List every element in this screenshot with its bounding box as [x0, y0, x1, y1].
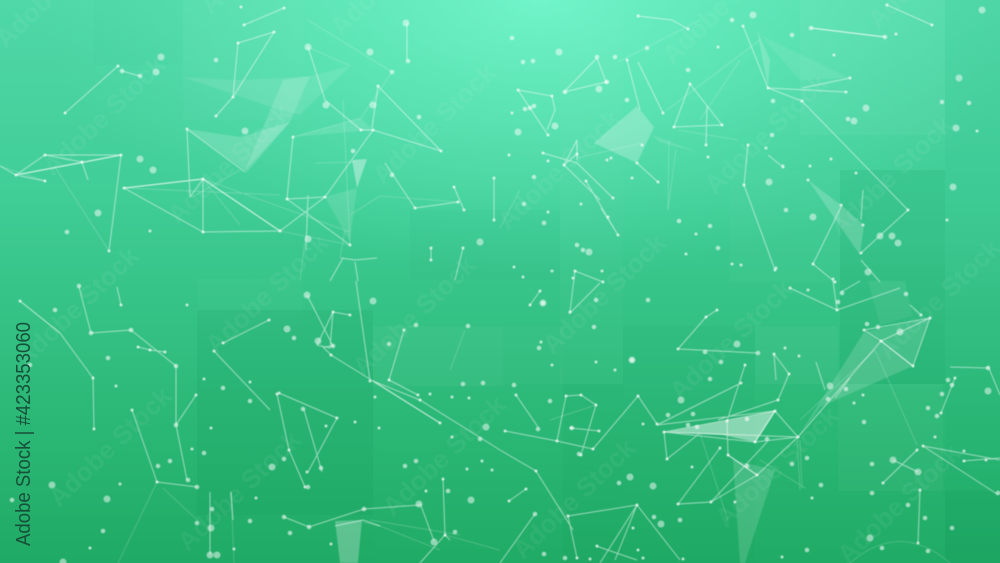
watermark: repeated Adobe Stock: Adobe Stock: [366, 57, 502, 190]
polygon cluster: upper right: [757, 30, 913, 325]
watermark: repeated Adobe Stock: Adobe Stock: [663, 273, 799, 406]
watermark: repeated Adobe Stock: Adobe Stock: [346, 249, 482, 382]
watermark: repeated Adobe Stock: Adobe Stock: [491, 103, 627, 236]
watermark: repeated Adobe Stock: Adobe Stock: [506, 432, 642, 563]
polygon cluster: top centre kite: [594, 106, 700, 163]
watermark: repeated Adobe Stock: Adobe Stock: [823, 109, 959, 242]
watermark: repeated Adobe Stock: Adobe Stock: [199, 227, 335, 360]
polygon cluster: lower right beam: [664, 318, 930, 563]
watermark: repeated Adobe Stock: Adobe Stock: [36, 49, 172, 182]
watermark: repeated Adobe Stock: Adobe Stock: [376, 389, 512, 522]
watermark: repeated Adobe Stock: Adobe Stock: [171, 424, 307, 557]
stock image id label: Adobe Stock | #423353060: [13, 322, 35, 546]
watermark: repeated Adobe Stock: Adobe Stock: [42, 380, 178, 513]
polygon cluster: upper left: [182, 66, 373, 172]
translucent plexus polygons: [182, 30, 930, 563]
bright plexus highlight lines: [16, 28, 913, 475]
watermark: repeated Adobe Stock: Adobe Stock: [536, 227, 672, 360]
polygon cluster: small triangle and wedge: [325, 159, 367, 242]
polygon: bottom wedge: [335, 520, 362, 563]
watermark: repeated Adobe Stock: Adobe Stock: [698, 67, 834, 200]
watermark: repeated Adobe Stock: Adobe Stock: [161, 97, 297, 230]
watermark: repeated Adobe Stock: Adobe Stock: [709, 400, 845, 533]
watermark: repeated Adobe Stock: Adobe Stock: [9, 240, 145, 373]
